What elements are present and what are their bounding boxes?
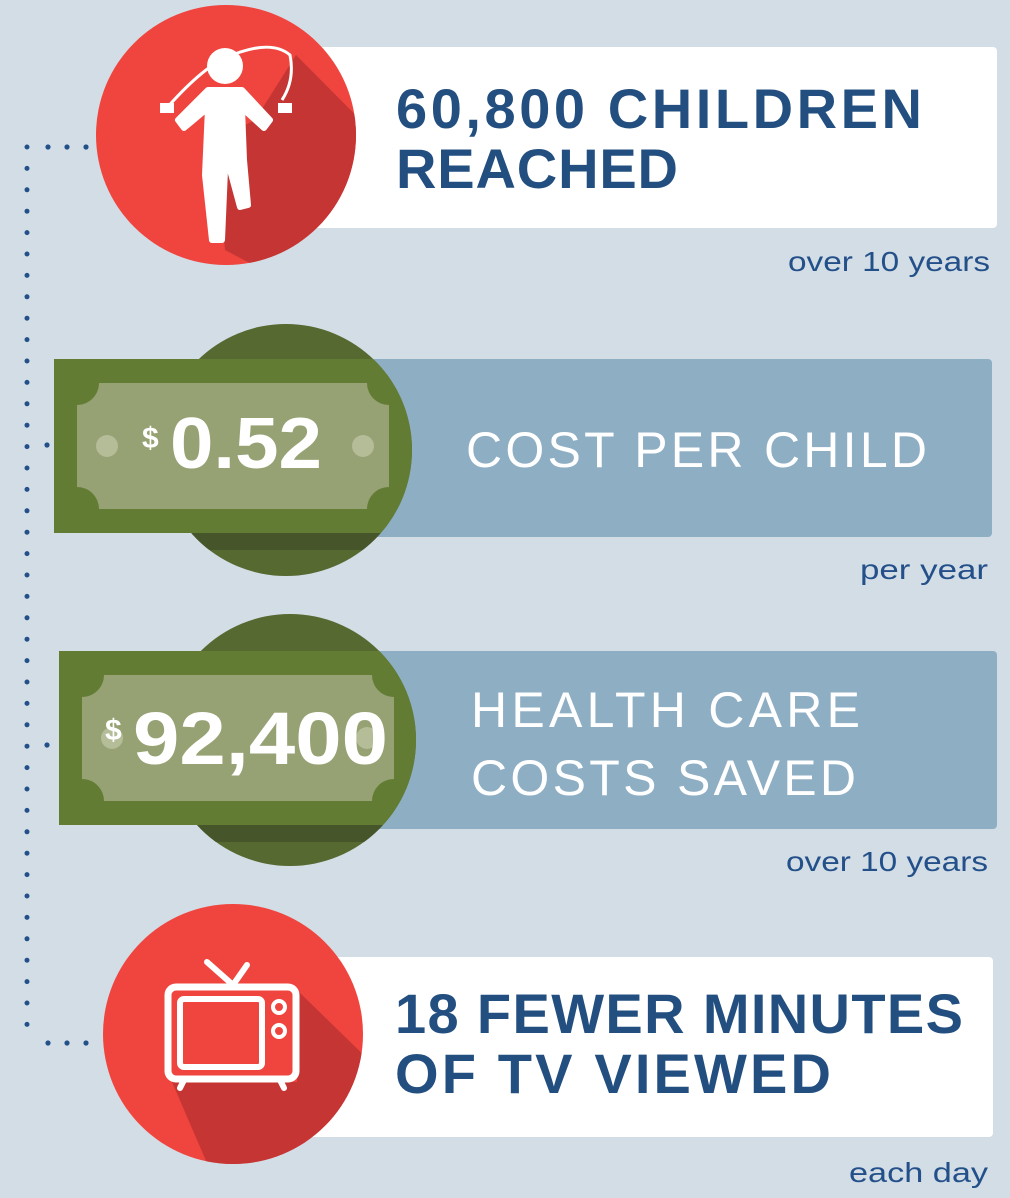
heading: 60,800 children reached: 60,800 CHILDREN <box>396 77 922 140</box>
panel: health care costs saved <box>59 614 997 866</box>
dotted connector line <box>27 144 89 1046</box>
panel: fewer minutes of tv <box>103 904 993 1164</box>
caption: over 10 years: over 10 years <box>786 846 988 877</box>
icon: bill $92,400: $ <box>105 714 122 747</box>
heading: 18 fewer minutes of tv viewed: OF TV VIEWED <box>395 1042 831 1105</box>
icon: bill $0.52: 0.52 <box>170 404 322 484</box>
caption: per year: per year <box>860 554 988 585</box>
panel: children reached <box>96 5 997 265</box>
heading: 18 fewer minutes of tv viewed <box>395 982 963 1105</box>
heading: 18 fewer minutes of tv viewed: 18 FEWER MINUTES <box>395 982 963 1045</box>
heading: health care costs saved: COSTS SAVED <box>471 750 856 806</box>
caption: each day: each day <box>849 1157 988 1188</box>
heading: health care costs saved <box>471 682 860 806</box>
heading: cost per child: COST PER CHILD <box>466 422 927 478</box>
icon: bill $0.52 <box>54 324 430 576</box>
caption: over 10 years: over 10 years <box>788 246 990 277</box>
icon: bill $92,400: 92,400 <box>133 697 388 780</box>
panel: cost per child <box>54 324 992 576</box>
heading: 60,800 children reached: REACHED <box>396 137 678 200</box>
icon: jump rope child <box>96 5 356 265</box>
heading: health care costs saved: HEALTH CARE <box>471 682 860 738</box>
heading: 60,800 children reached <box>396 77 922 200</box>
icon: tv <box>103 904 363 1164</box>
icon: bill $92,400 <box>59 614 430 866</box>
icon: bill $0.52: $ <box>142 422 159 455</box>
